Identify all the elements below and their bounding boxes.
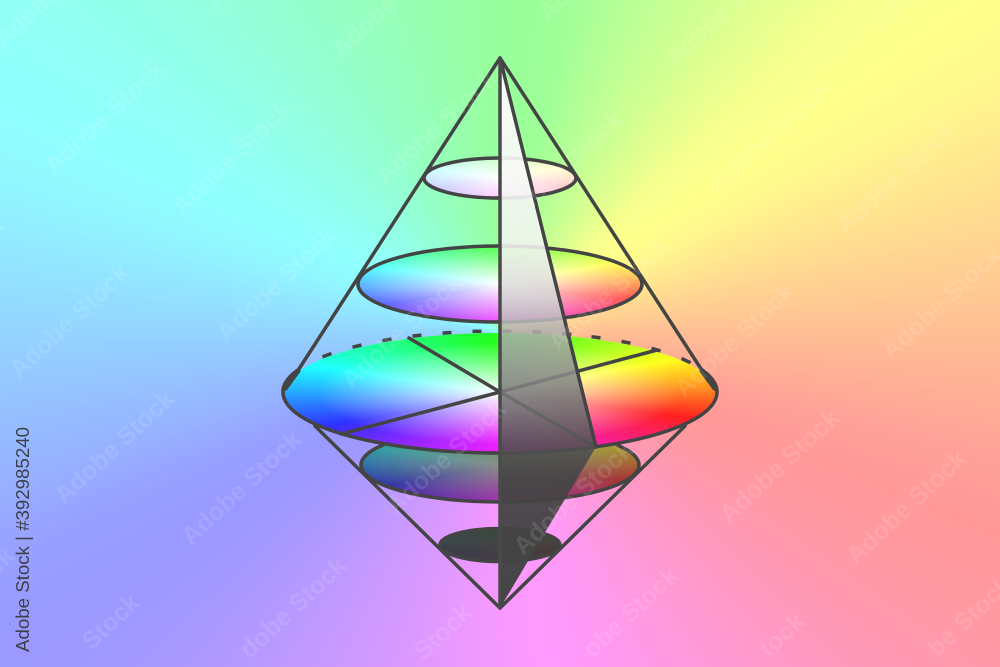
disc: top near-white level [425,159,575,197]
ellipse outlines of the levels [358,158,642,562]
main disc dashed back rim [322,331,690,363]
watermark: Adobe Stock [39,55,170,179]
hue wedge spokes [341,338,657,447]
watermark: Adobe Stock [381,395,512,519]
watermark: Adobe Stock [166,96,297,220]
watermark: Adobe Stock [508,436,639,560]
cone edges [297,58,703,608]
watermark: Adobe Stock [498,106,629,230]
main disc front rim [283,369,717,453]
watermark: Adobe Stock [831,115,962,239]
disc: main saturated level [284,333,716,453]
watermark: Adobe Stock [371,65,502,189]
watermark: Adobe Stock [841,445,972,569]
watermark: Stock [76,588,145,655]
disc: bottom dark level [440,529,560,561]
watermark: Adobe Stock [176,426,307,550]
grey lightness slice [500,58,596,608]
watermark: obe Stock [577,561,684,663]
watermark: Adobe Stock [669,278,800,402]
watermark: dobe Stock [235,551,352,664]
disc: upper light level [359,247,641,321]
watermark: Adobe Stock [704,74,835,198]
stock id caption: Adobe Stock | #392985240 [13,427,33,652]
watermark: Adobe Stock [714,404,845,528]
watermark: Adobe Stock [336,269,467,393]
watermark: tock [754,607,810,663]
watermark: Adobe Stock [49,385,180,509]
watermark: Adobe Stock [543,232,674,356]
disc: lower dark level [362,429,638,501]
watermark: Stock [408,598,477,665]
watermark: Adobe Stock [211,222,342,346]
watermark: Adobe Stock [4,259,135,383]
